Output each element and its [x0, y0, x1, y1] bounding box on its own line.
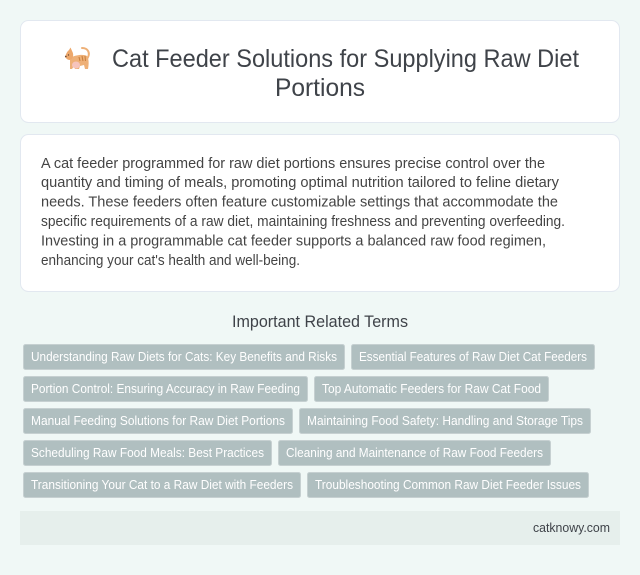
- text block: description paragraph: [41, 155, 565, 269]
- tag: [24, 376, 308, 402]
- footer: [20, 511, 620, 545]
- title: Cat Feeder Solutions for Supplying Raw Diet: [112, 45, 579, 73]
- title: Portions: [275, 74, 365, 102]
- tag: Cleaning and Maintenance of Raw Food Feeders: [286, 445, 543, 460]
- footer: catknowy.com: [533, 520, 610, 535]
- tag: [24, 472, 300, 498]
- tag list: [24, 344, 594, 498]
- tag: Manual Feeding Solutions for Raw Diet Portions: [31, 413, 285, 428]
- panel: title card: [20, 20, 620, 122]
- tag: [278, 440, 550, 466]
- heading: related terms: Important Related Terms: [232, 313, 408, 331]
- tag: Portion Control: Ensuring Accuracy in Raw Feeding: [31, 381, 300, 396]
- text block: description paragraph: quantity and timing of meals, promoting optimal nutrition tailored to feline dietary: [41, 174, 559, 191]
- tag: Transitioning Your Cat to a Raw Diet with Feeders: [31, 477, 293, 492]
- tag: [314, 376, 548, 402]
- tag: [352, 344, 594, 370]
- tag: Understanding Raw Diets for Cats: Key Benefits and Risks: [31, 349, 337, 364]
- tag: [300, 408, 590, 434]
- tag: Top Automatic Feeders for Raw Cat Food: [322, 381, 541, 396]
- text block: description paragraph: A cat feeder programmed for raw diet portions ensures precise control over the: [41, 155, 545, 172]
- text block: description paragraph: Investing in a programmable cat feeder supports a balanced raw food regimen,: [41, 232, 546, 250]
- tag: Maintaining Food Safety: Handling and Storage Tips: [307, 413, 583, 428]
- text block: description paragraph: needs. These feeders often feature customizable settings that accommodate the: [41, 194, 558, 210]
- panel: description: [20, 134, 620, 292]
- tag: Troubleshooting Common Raw Diet Feeder Issues: [315, 477, 581, 492]
- text block: description paragraph: enhancing your cat's health and well-being.: [41, 252, 300, 269]
- tag: [24, 440, 272, 466]
- tag: [24, 344, 344, 370]
- tag: Scheduling Raw Food Meals: Best Practices: [31, 445, 264, 460]
- title: [112, 45, 579, 102]
- tag: Essential Features of Raw Diet Cat Feeders: [359, 349, 587, 364]
- tag: [308, 472, 588, 498]
- icon: cat: [65, 48, 89, 69]
- text block: description paragraph: specific requirements of a raw diet, maintaining freshness and preventing overfeeding.: [41, 213, 565, 230]
- tag: [24, 408, 292, 434]
